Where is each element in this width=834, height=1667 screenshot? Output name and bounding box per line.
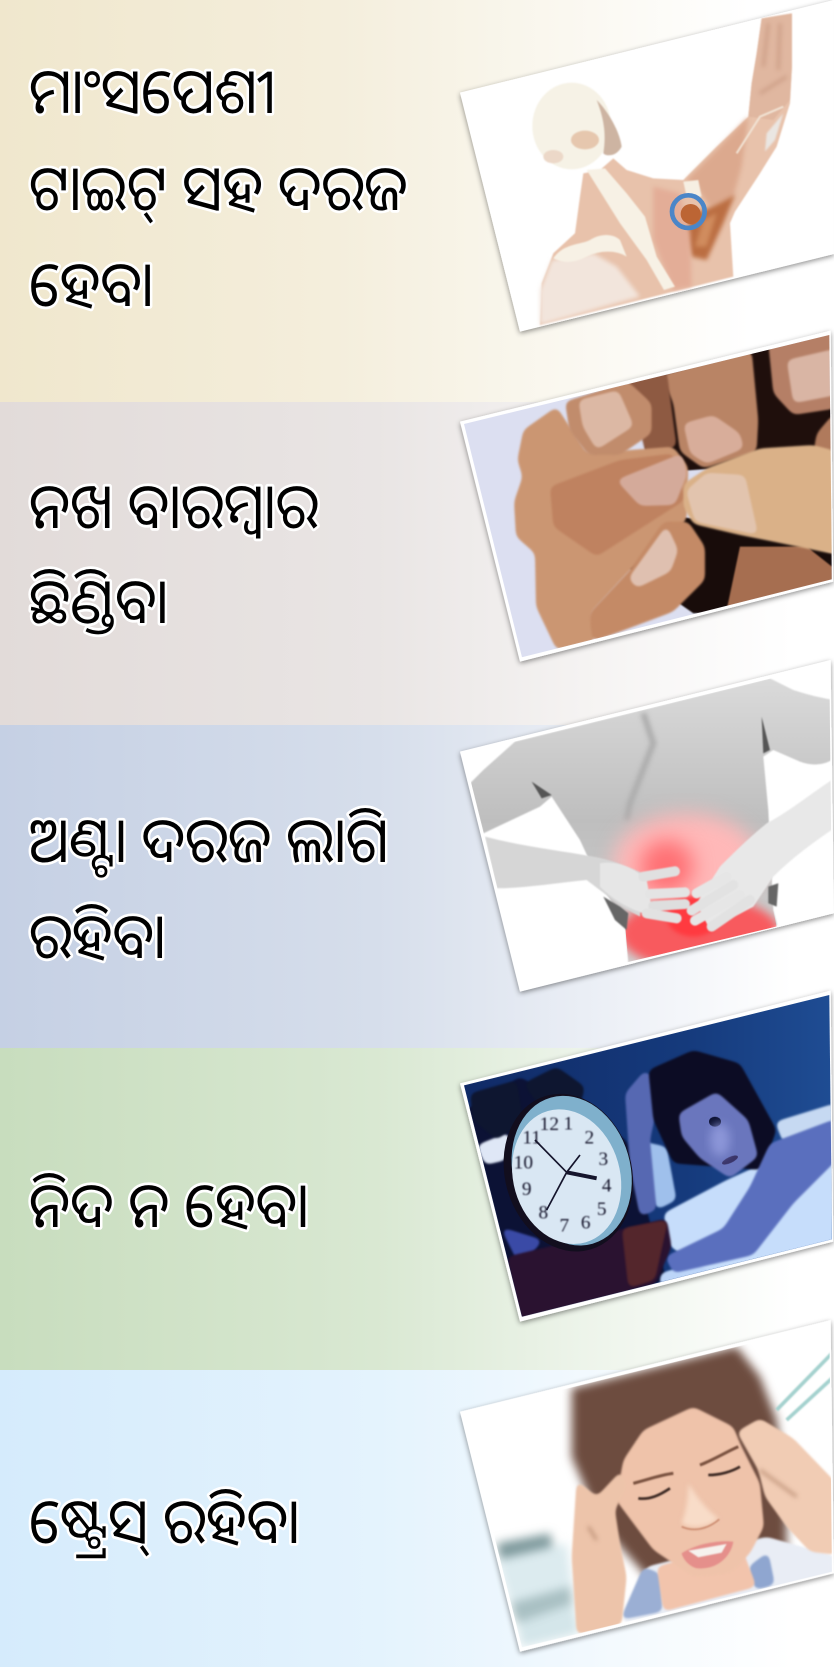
icon: alarm clock face (504, 1094, 633, 1252)
heading: tight muscle pain: ଟାଇଟ୍ ସହ ଦରଜ (29, 142, 408, 229)
photo: back muscles (460, 0, 834, 332)
heading: back pain: ଅଣ୍ଟା ଦରଜ ଲାଗି (29, 794, 389, 881)
heading: back pain: ରହିବା (29, 890, 166, 977)
icon: alarm clock face: 7 (559, 1216, 569, 1237)
heading: tight muscle pain: ମାଂସପେଶୀ (29, 45, 275, 132)
icon: alarm clock face: 3 (598, 1149, 608, 1170)
photo: lower back pain (460, 660, 834, 992)
heading: stress: ଷ୍ଟ୍ରେସ୍ ରହିବା (29, 1475, 300, 1562)
photo: woman awake with alarm clock (457, 987, 834, 1323)
icon: alarm clock face: 10 (514, 1152, 533, 1173)
icon: alarm clock face: 8 (538, 1202, 548, 1223)
icon: alarm clock face: 12 (540, 1114, 559, 1135)
icon: alarm clock face: 2 (584, 1127, 594, 1148)
heading: tight muscle pain (29, 45, 408, 325)
heading: nails breaking: ଛିଣ୍ଡିବା (29, 555, 168, 642)
icon: alarm clock face: 5 (597, 1199, 606, 1220)
icon: alarm clock face: 11 (522, 1127, 541, 1148)
photo: cracked nails (457, 327, 834, 663)
heading: back pain (29, 794, 389, 977)
icon: alarm clock face: 6 (581, 1212, 591, 1233)
heading: nails breaking: ନଖ ବାରମ୍ବାର (29, 460, 319, 547)
icon: blue target ring (672, 195, 705, 228)
icon: alarm clock face: 9 (522, 1179, 531, 1200)
heading: tight muscle pain: ହେବା (29, 238, 153, 325)
heading: no sleep: ନିଦ ନ ହେବା (29, 1159, 309, 1246)
photo: woman with headache (460, 1320, 834, 1652)
heading: nails breaking (29, 460, 319, 642)
icon: alarm clock face: 4 (602, 1176, 612, 1197)
icon: alarm clock face: 1 (563, 1113, 573, 1134)
